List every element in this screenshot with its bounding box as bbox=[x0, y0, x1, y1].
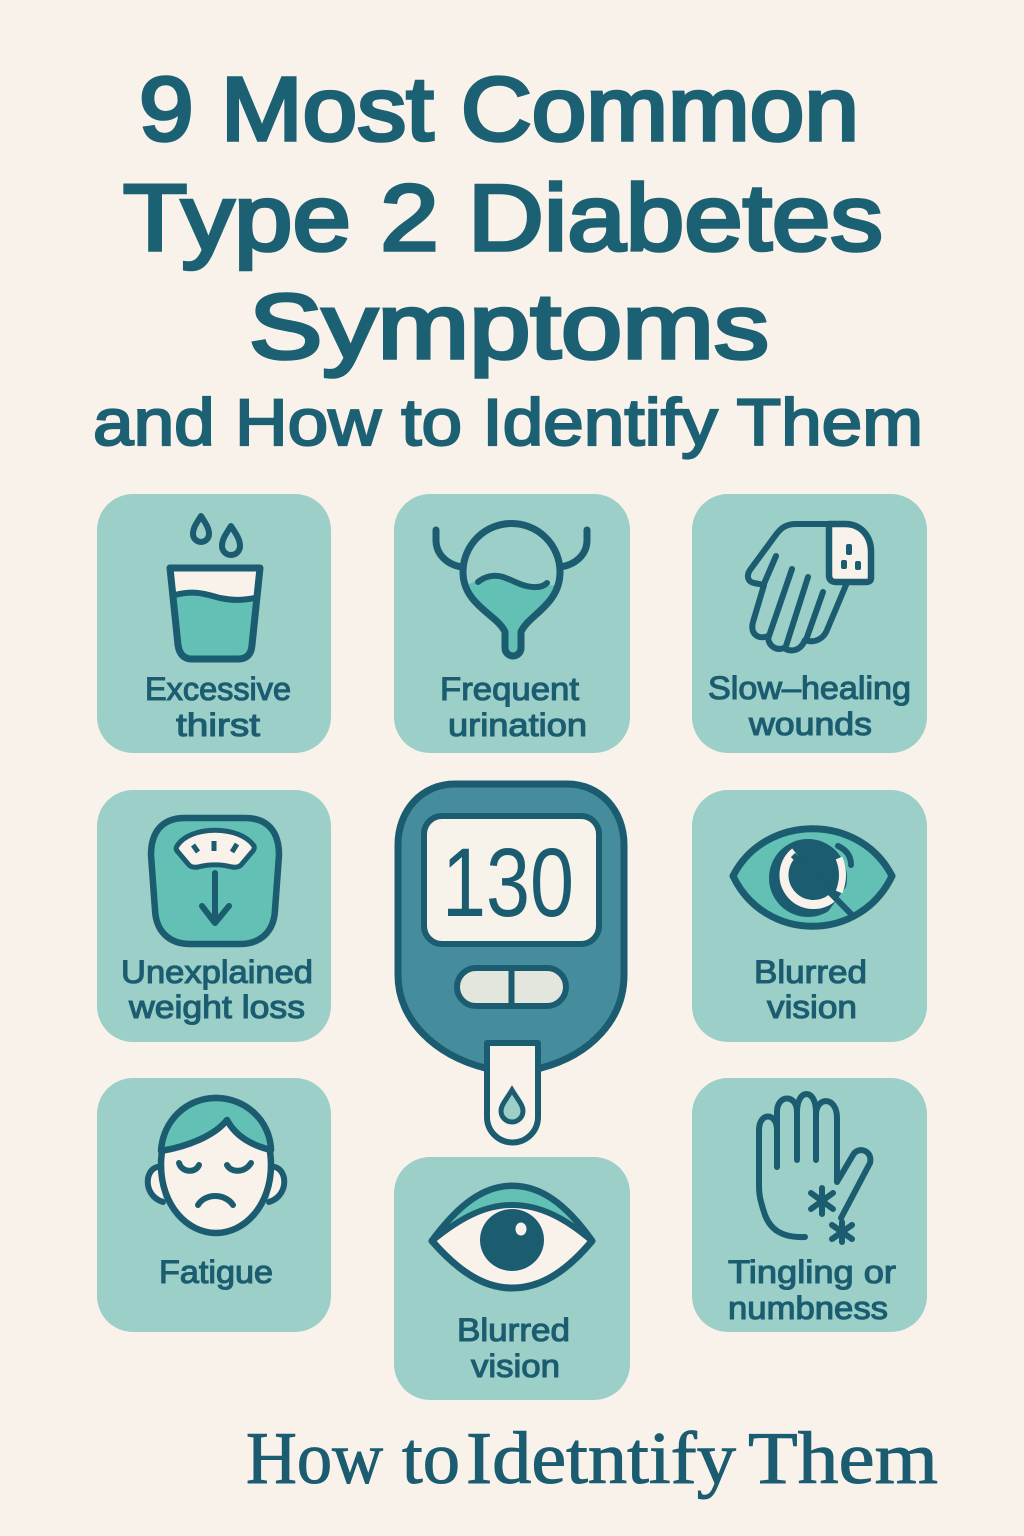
label: vision bbox=[767, 989, 857, 1025]
label: Tingling or bbox=[728, 1254, 896, 1290]
test strip with drop bbox=[487, 1043, 538, 1143]
icon: glass of water with drops bbox=[170, 516, 260, 659]
panel: blurred vision (slashed eye) bbox=[692, 790, 927, 1042]
label: thirst bbox=[176, 707, 260, 743]
icon: hand with bandage bbox=[748, 524, 871, 650]
label: vision bbox=[471, 1348, 560, 1384]
label bbox=[708, 670, 911, 742]
label: Frequent bbox=[440, 671, 579, 707]
central glucose meter bbox=[398, 784, 624, 1143]
footer heading bbox=[246, 1418, 938, 1500]
meter screen: 130 bbox=[442, 828, 574, 937]
panel: unexplained weight loss bbox=[97, 790, 331, 1042]
footer heading: Idetntify bbox=[466, 1418, 736, 1500]
title: Type 2 Diabetes bbox=[123, 165, 883, 270]
footer heading: to bbox=[402, 1418, 460, 1500]
panel: tingling or numbness bbox=[692, 1078, 927, 1332]
label: wounds bbox=[748, 706, 872, 742]
label: numbness bbox=[728, 1290, 888, 1326]
title: Symptoms bbox=[249, 276, 769, 378]
icon: bladder bbox=[436, 523, 587, 656]
label bbox=[457, 1312, 570, 1384]
label bbox=[121, 954, 313, 1025]
icon: tired face bbox=[148, 1098, 284, 1233]
icon: slashed eye bbox=[733, 829, 892, 926]
label bbox=[440, 671, 587, 743]
panel: slow-healing wounds bbox=[692, 494, 927, 753]
meter body bbox=[398, 784, 624, 1068]
label bbox=[728, 1254, 896, 1326]
panel: fatigue bbox=[97, 1078, 331, 1332]
label: Blurred bbox=[754, 954, 867, 990]
meter button bbox=[457, 968, 566, 1006]
label: Unexplained bbox=[121, 954, 313, 990]
icon: open eye bbox=[432, 1186, 592, 1288]
panel: blurred vision (open eye) bbox=[394, 1157, 630, 1400]
label: Fatigue bbox=[159, 1254, 273, 1290]
label bbox=[754, 954, 867, 1025]
icon: weighing scale bbox=[151, 818, 279, 944]
panel: excessive thirst bbox=[97, 494, 331, 753]
label: Slow–healing bbox=[708, 670, 911, 706]
title bbox=[93, 60, 923, 459]
title: and How to Identify Them bbox=[93, 385, 923, 459]
icon: hand with tingling marks bbox=[759, 1094, 870, 1242]
label: Excessive bbox=[145, 671, 291, 707]
label: urination bbox=[448, 707, 587, 743]
footer heading: How bbox=[246, 1418, 384, 1500]
title: 9 Most Common bbox=[139, 60, 859, 160]
footer heading: Them bbox=[748, 1418, 938, 1500]
panel: frequent urination bbox=[394, 494, 630, 753]
label: Blurred bbox=[457, 1312, 570, 1348]
label: weight loss bbox=[128, 989, 305, 1025]
label bbox=[145, 671, 291, 743]
